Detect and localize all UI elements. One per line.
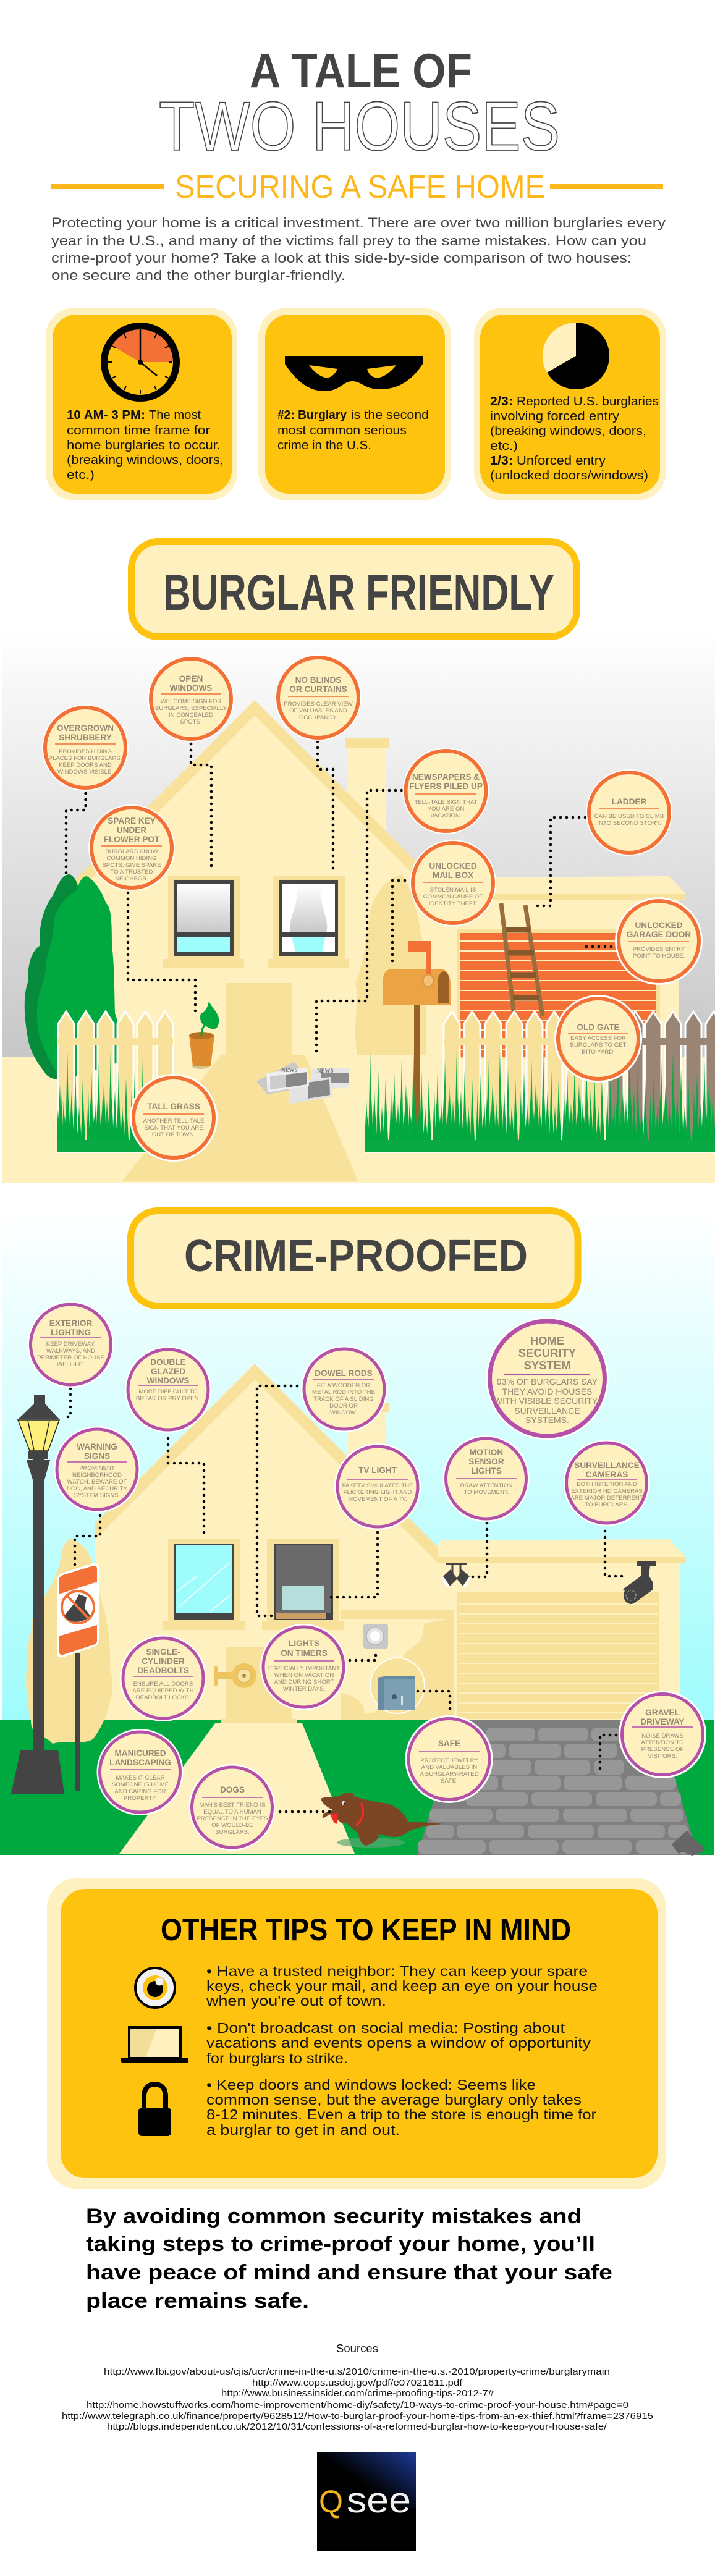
sources: http://www.businessinsider.com/crime-proofing-tips-2012-7#: [221, 2388, 494, 2399]
newspapers: [256, 1062, 349, 1104]
callout: manicured landscaping: PROPERTY.: [124, 1795, 157, 1802]
tips heading: OTHER TIPS TO KEEP IN MIND: [161, 1912, 571, 1947]
callout: single-cylinder deadbolts: ENSURE ALL DOORS: [133, 1681, 193, 1687]
callout: open windows: BURGLARS, ESPECIALLY: [155, 705, 227, 712]
callout: home security system: HOME: [530, 1334, 564, 1347]
callout: TV light: FAKETV SIMULATES THE: [342, 1482, 413, 1489]
callout: manicured landscaping: MANICURED: [114, 1749, 166, 1758]
callout: newspapers and flyers piled up: VACATION.: [430, 813, 462, 819]
callout: unlocked mail box: IDENTITY THEFT.: [429, 900, 477, 907]
callout: TV light: [334, 1443, 421, 1530]
callout: manicured landscaping: [96, 1729, 183, 1815]
callout: dogs: OF WOULD-BE: [211, 1822, 253, 1829]
callout: single-cylinder deadbolts: CYLINDER: [142, 1657, 185, 1666]
callout: motion sensor lights: [442, 1435, 529, 1522]
panel: forced entry stat card: 2/3:: [490, 395, 513, 408]
heading: burglar friendly: BURGLAR FRIENDLY: [163, 565, 554, 621]
callout: lights on timers: [260, 1624, 347, 1710]
callout: unlocked mail box: COMMON CAUSE OF: [423, 893, 483, 900]
double glazed window: [163, 1539, 245, 1630]
deadbolt: [214, 1663, 256, 1688]
sources: http://www.telegraph.co.uk/finance/property/9628512/How-to-burglar-proof-your-home-tips-from-an-ex-thief.html?frame=2376915: [62, 2411, 653, 2422]
panel: time frame stat card: (breaking windows, doors,: [67, 454, 224, 467]
callout: home security system: WITH VISIBLE SECURITY/: [494, 1396, 600, 1406]
closing statement: By avoiding common security mistakes and: [86, 2205, 582, 2228]
callout: lights on timers: ON TIMERS: [281, 1649, 328, 1658]
tip: social media: for burglars to strike.: [206, 2050, 348, 2066]
callout: lights on timers: WHEN ON VACATION: [274, 1672, 334, 1679]
callout: exterior lighting: KEEP DRIVEWAY,: [46, 1341, 95, 1348]
callout: exterior lighting: [27, 1301, 114, 1388]
open window: [163, 876, 244, 968]
ladder: [501, 903, 543, 1016]
mailbox: [383, 941, 451, 1132]
right fence and old gate: [444, 1011, 715, 1151]
intro paragraph: crime-proof your home? Take a look at this side-by-side comparison of two houses:: [51, 250, 632, 266]
callout: exterior lighting: WELL-LIT.: [57, 1361, 85, 1368]
callout: spare key under flower pot: SPOTS. GIVE SPARE: [102, 862, 161, 869]
tip: trusted neighbor: keys, check your mail, and keep an eye on your house: [206, 1978, 598, 1994]
callout: ladder: LADDER: [612, 797, 647, 806]
callout: exterior lighting: WALKWAYS, AND: [46, 1348, 95, 1354]
title: Two Houses outlined: TWO HOUSES: [159, 88, 560, 165]
callout: TV light: TV LIGHT: [358, 1466, 397, 1475]
icon: light timer: [363, 1624, 388, 1649]
callout: dowel rods: DOOR OR: [329, 1403, 358, 1409]
callout: manicured landscaping: MAKES IT CLEAR: [116, 1775, 165, 1781]
panel: burglary rank stat card: #2: Burglary: [277, 408, 347, 422]
callout: newspapers and flyers piled up: YOU ARE ON: [428, 806, 464, 813]
panel: forced entry stat card: Reported U.S. burglaries: [517, 395, 659, 408]
icon: clock: [104, 326, 177, 398]
panel: burglary rank stat card: [258, 308, 451, 500]
callout: surveillance cameras: TO BURGLARS.: [585, 1501, 629, 1508]
callout: unlocked garage door: POINT TO HOUSE.: [633, 953, 685, 960]
callout: tall grass: [130, 1074, 218, 1162]
closing statement: taking steps to crime-proof your home, you’ll: [86, 2232, 595, 2256]
front door: [221, 1647, 297, 1724]
callout: surveillance cameras: [564, 1440, 650, 1526]
sources: http://blogs.independent.co.uk/2012/10/31/confessions-of-a-reformed-burglar-how-to-keep-your-house-safe/: [107, 2422, 607, 2432]
callout: open windows: IN CONCEALED: [169, 712, 213, 719]
callout: dogs: EQUAL TO A HUMAN: [203, 1809, 261, 1815]
panel: burglary rank stat card: is the second: [351, 408, 429, 422]
title: A Tale Of: A TALE OF: [250, 43, 472, 98]
callout: exterior lighting: LIGHTING: [51, 1328, 91, 1337]
callout: home security system: [486, 1317, 608, 1440]
callout: unlocked garage door: PROVIDES ENTRY: [633, 946, 685, 953]
callout: double glazed windows: WINDOWS: [147, 1376, 189, 1385]
flower pot: [189, 1001, 219, 1069]
callout: overgrown shrubbery: OVERGROWN: [57, 724, 114, 733]
callout: gravel driveway: ATTENTION TO: [641, 1739, 684, 1746]
gravel driveway: [417, 1720, 704, 1856]
callout: old gate: EASY ACCESS FOR: [570, 1035, 626, 1042]
callout: old gate: INTO YARD.: [582, 1049, 615, 1055]
callout: lights on timers: LIGHTS: [289, 1639, 319, 1648]
tip: trusted neighbor: [206, 1963, 598, 2009]
icon: safe: [370, 1658, 425, 1713]
callout: spare key under flower pot: BURGLARS KNOW: [105, 848, 159, 855]
callout: gravel driveway: GRAVEL: [645, 1708, 680, 1717]
tip: locked doors: a burglar to get in and out.: [206, 2122, 400, 2138]
icon: motion sensor lights: [442, 1563, 470, 1587]
callout: motion sensor lights: LIGHTS: [471, 1466, 502, 1476]
callout: old gate: OLD GATE: [577, 1023, 620, 1032]
tip: social media: • Don't broadcast on social media: Posting about: [206, 2020, 565, 2036]
tip: social media: [206, 2020, 591, 2066]
callout: tall grass: TALL GRASS: [147, 1102, 200, 1111]
callout: surveillance cameras: CAMERAS: [586, 1470, 628, 1479]
callout: safe: AND VALUABLES IN: [421, 1764, 477, 1771]
callout: overgrown shrubbery: PROVIDES HIDING: [59, 748, 112, 755]
callout: TV light: FLICKERING LIGHT AND: [344, 1489, 412, 1496]
subtitle: Securing a safe home with rules: [51, 169, 663, 205]
sources: http://home.howstuffworks.com/home-improvement/home-diy/safety/10-ways-to-crime-proof-your-house.htm#page=0: [87, 2400, 628, 2410]
callout: home security system: THEY AVOID HOUSES: [502, 1387, 592, 1396]
callout: newspapers and flyers piled up: FLYERS PILED UP: [409, 782, 483, 791]
callout: dowel rods: METAL ROD INTO THE: [312, 1389, 375, 1396]
callout: old gate: [554, 995, 642, 1083]
callout: surveillance cameras: ARE MAJOR DETERRENT: [570, 1495, 643, 1501]
callout: dogs: MAN'S BEST FRIEND IS: [199, 1802, 266, 1809]
heading: burglar friendly: [131, 541, 577, 636]
callout: warning signs: NEIGHBORHOOD: [72, 1472, 122, 1479]
sources: http://www.fbi.gov/about-us/cjis/ucr/crime-in-the-u.s/2010/crime-in-the-u.s.-2010/property-crime/burglarymain: [104, 2367, 610, 2377]
dotted leader lines: [66, 741, 611, 1052]
panel: forced entry stat card: [474, 308, 666, 500]
logo: Q-See: [317, 2452, 416, 2551]
chimney: [345, 738, 389, 868]
callout: dowel rods: TRACK OF A SLIDING: [313, 1396, 374, 1403]
callout: spare key under flower pot: FLOWER POT: [104, 835, 160, 844]
callout: motion sensor lights: DRAW ATTENTION: [460, 1482, 512, 1489]
house body and roof: [95, 1364, 438, 1720]
callout: no blinds or curtains: OCCUPANCY.: [299, 714, 337, 721]
callout: safe: PROTECT JEWELRY: [420, 1757, 478, 1764]
callout: no blinds or curtains: OF VALUABLES AND: [289, 707, 347, 714]
callout: dogs: [189, 1764, 276, 1851]
callout: no blinds or curtains: NO BLINDS: [295, 675, 341, 685]
garage: [433, 876, 686, 1059]
callout: manicured landscaping: SOMEONE IS HOME: [112, 1781, 169, 1788]
panel: forced entry stat card: (unlocked doors/windows): [490, 469, 648, 483]
panel: forced entry stat card: Unforced entry: [517, 454, 606, 468]
subtitle: Securing a safe home with rules: SECURING A SAFE HOME: [175, 169, 545, 205]
warning sign: [57, 1563, 99, 1791]
door and walkway: [122, 983, 358, 1181]
panel: time frame stat card: home burglaries to occur.: [67, 439, 221, 452]
callout: surveillance cameras: SURVEILLANCE: [574, 1461, 640, 1470]
callout: exterior lighting: PERIMETER OF HOUSE: [37, 1354, 104, 1361]
callout: warning signs: SIGNS: [84, 1451, 110, 1461]
callout: lights on timers: WINTER DAYS.: [283, 1686, 325, 1692]
closing statement: place remains safe.: [86, 2289, 309, 2313]
callout: ladder: INTO SECOND STORY.: [597, 820, 661, 827]
callout: open windows: OPEN: [179, 674, 203, 683]
tall grass: [57, 1049, 715, 1152]
callout: unlocked garage door: GARAGE DOOR: [627, 930, 691, 939]
callout: no blinds or curtains: [275, 654, 362, 741]
callout: dowel rods: [301, 1346, 387, 1432]
callout: overgrown shrubbery: SHRUBBERY: [59, 733, 112, 742]
icon: padlock: [138, 2084, 171, 2136]
icon: laptop: [121, 2027, 188, 2063]
callout: manicured landscaping: AND CARING FOR: [114, 1788, 166, 1795]
callout: no blinds or curtains: OR CURTAINS: [289, 685, 347, 694]
callout: gravel driveway: NOISE DRAWS: [641, 1733, 683, 1739]
tip: trusted neighbor: when you're out of town.: [206, 1993, 386, 2009]
callout: unlocked mail box: UNLOCKED: [429, 861, 477, 871]
sources: Sources: [336, 2342, 378, 2355]
callout: home security system: SYSTEMS.: [525, 1415, 569, 1425]
intro paragraph: one secure and the other burglar-friendly.: [51, 268, 345, 283]
callout: single-cylinder deadbolts: [120, 1635, 206, 1721]
garage: [433, 1539, 686, 1720]
panel: time frame stat card: [46, 308, 237, 500]
callout: newspapers and flyers piled up: [403, 748, 489, 834]
closing statement: have peace of mind and ensure that your safe: [86, 2261, 612, 2284]
intro paragraph: year in the U.S., and many of the victims fall prey to the same mistakes. How can you: [51, 233, 646, 248]
window with TV light: [262, 1539, 344, 1630]
recessed porch with safe niche: [341, 1610, 454, 1720]
panel: forced entry stat card: (breaking windows, doors,: [490, 424, 646, 438]
callout: overgrown shrubbery: KEEP DOORS AND: [59, 762, 112, 769]
callout: manicured landscaping: LANDSCAPING: [109, 1758, 171, 1767]
overgrown shrubbery: [25, 874, 118, 1081]
newspapers: NEWS: [317, 1068, 334, 1074]
callout: warning signs: WARNING: [77, 1442, 117, 1451]
callout: open windows: WELCOME SIGN FOR: [161, 698, 221, 705]
callout: dowel rods: FIT A WOODEN OR: [317, 1382, 370, 1389]
callout: lights on timers: AND DURING SHORT: [274, 1679, 334, 1686]
scene: burglar friendly house: [2, 630, 715, 1183]
callout: no blinds or curtains: PROVIDES CLEAR VIEW: [284, 701, 353, 707]
window without blinds: [268, 876, 349, 968]
callout: gravel driveway: [619, 1691, 706, 1778]
callout: home security system: SYSTEM: [523, 1359, 571, 1372]
walkway: [119, 1723, 355, 1854]
callout: single-cylinder deadbolts: DEADBOLT LOCKS.: [136, 1694, 190, 1701]
callout: ladder: [586, 769, 672, 856]
callout: double glazed windows: GLAZED: [151, 1367, 185, 1376]
callout: unlocked mail box: [410, 840, 496, 926]
callout: open windows: [148, 656, 234, 742]
tip: trusted neighbor: • Have a trusted neighbor: They can keep your spare: [206, 1963, 588, 1979]
logo: Q-See: see: [347, 2480, 411, 2520]
callout: home security system: 93% OF BURGLARS SAY: [497, 1377, 598, 1387]
callout: motion sensor lights: MOTION: [470, 1448, 503, 1457]
tip: locked doors: common sense, but the average burglary only takes: [206, 2092, 582, 2108]
callout: double glazed windows: BREAK OR PRY OPEN.: [136, 1395, 200, 1402]
newspapers: NEWS: [281, 1067, 298, 1073]
panel: forced entry stat card: etc.): [490, 439, 518, 453]
callout: dowel rods: DOWEL RODS: [315, 1369, 373, 1378]
panel: other tips to keep in mind: [47, 1878, 666, 2189]
callout: tall grass: ANOTHER TELL-TALE: [143, 1118, 204, 1125]
callout: warning signs: DOG, AND SECURITY: [67, 1485, 128, 1492]
callout: double glazed windows: DOUBLE: [150, 1358, 186, 1367]
callout: spare key under flower pot: [88, 804, 175, 891]
callout: gravel driveway: DRIVEWAY: [640, 1717, 685, 1726]
intro paragraph: Protecting your home is a critical investment. There are over two million burglaries every: [51, 215, 666, 230]
callout: home security system: SECURITY: [518, 1346, 577, 1359]
panel: time frame stat card: common time frame for: [67, 424, 210, 437]
scene: crime-proofed house: [0, 1211, 714, 1856]
callout: overgrown shrubbery: WINDOWS VISIBLE.: [57, 769, 113, 775]
callout: double glazed windows: [125, 1346, 211, 1433]
callout: spare key under flower pot: SPARE KEY: [108, 816, 156, 826]
callout: safe: A BURGLARY-RATED: [420, 1771, 479, 1778]
callout: spare key under flower pot: UNDER: [117, 826, 146, 835]
callout: newspapers and flyers piled up: TELL-TALE SIGN THAT: [414, 799, 478, 806]
callout: warning signs: [54, 1426, 140, 1513]
chimney: [345, 1403, 389, 1535]
callout: tall grass: SIGN THAT YOU ARE: [144, 1125, 203, 1131]
tip: social media: vacations and events opens a window of opportunity: [206, 2035, 591, 2051]
icon: one third pie chart: [543, 323, 609, 389]
callout: home security system: SURVEILLANCE: [514, 1406, 580, 1416]
callout: tall grass: OUT OF TOWN.: [152, 1131, 195, 1138]
callout: safe: [405, 1715, 493, 1803]
callout: unlocked garage door: UNLOCKED: [635, 921, 683, 930]
callout: dowel rods: WINDOW.: [330, 1409, 357, 1416]
callout: spare key under flower pot: COMMON HIDING: [106, 855, 157, 862]
panel: forced entry stat card: 1/3:: [490, 454, 513, 468]
panel: time frame stat card: 10 AM- 3 PM:: [67, 408, 145, 422]
callout: warning signs: PROMINENT: [79, 1465, 115, 1472]
dotted leader lines: [62, 1386, 628, 1812]
manicured shrub behind sign: [26, 1539, 112, 1744]
callout: safe: SAFE.: [441, 1778, 458, 1784]
callout: open windows: SPOTS.: [180, 719, 202, 725]
callout: gravel driveway: PRESENCE OF: [641, 1746, 684, 1753]
callout: warning signs: SYSTEM SIGNS.: [74, 1492, 120, 1499]
callout: single-cylinder deadbolts: DEADBOLTS: [137, 1666, 189, 1675]
tip: locked doors: • Keep doors and windows locked: Seems like: [206, 2077, 536, 2093]
panel: time frame stat card: etc.): [67, 468, 95, 482]
callout: open windows: WINDOWS: [170, 683, 212, 693]
gravel rocks: [672, 1831, 704, 1856]
heading: crime-proofed: [131, 1211, 578, 1306]
icon: guard dog: [321, 1793, 442, 1848]
callout: unlocked mail box: MAIL BOX: [433, 871, 473, 880]
callout: surveillance cameras: BOTH INTERIOR AND: [577, 1481, 637, 1488]
panel: time frame stat card: The most: [149, 408, 201, 422]
sources: [62, 2342, 653, 2432]
callout: unlocked mail box: STOLEN MAIL IS: [430, 887, 476, 893]
intro paragraph: [51, 215, 666, 283]
callout: newspapers and flyers piled up: NEWSPAPERS &: [412, 772, 480, 782]
callout: TV light: MOVEMENT OF A TV.: [348, 1496, 407, 1503]
panel: burglary rank stat card: most common serious: [277, 424, 407, 437]
icon: surveillance camera: [623, 1561, 656, 1604]
tip: locked doors: [206, 2077, 596, 2138]
callout: dogs: BURGLARS.: [215, 1829, 250, 1836]
sources: http://www.cops.usdoj.gov/pdf/e07021611.pdf: [252, 2378, 463, 2388]
callout: single-cylinder deadbolts: SINGLE-: [146, 1647, 180, 1657]
closing statement: [86, 2205, 612, 2313]
panel: burglary rank stat card: crime in the U.S.: [277, 439, 371, 452]
icon: burglar mask: [285, 356, 423, 391]
callout: gravel driveway: VISITORS.: [648, 1753, 677, 1760]
bush behind mailbox: [355, 874, 426, 1055]
house body and roof: [65, 700, 448, 1057]
panel: forced entry stat card: involving forced entry: [490, 410, 619, 423]
callout: motion sensor lights: TO MOVEMENT.: [464, 1489, 509, 1496]
callout: overgrown shrubbery: PLACES FOR BURGLARS.: [49, 755, 122, 762]
tip: locked doors: 8-12 minutes. Even a trip to the store is enough time for: [206, 2106, 596, 2122]
callout: ladder: CAN BE USED TO CLIMB: [594, 813, 664, 820]
callout: single-cylinder deadbolts: ARE EQUIPPED WITH: [132, 1687, 194, 1694]
callout: dogs: DOGS: [220, 1785, 245, 1794]
callout: dogs: PRESENCE IN THE EYES: [197, 1815, 268, 1822]
left fence: [58, 1011, 173, 1151]
heading: crime-proofed: CRIME-PROOFED: [184, 1231, 528, 1281]
callout: overgrown shrubbery: [42, 704, 129, 791]
icon: eye: [135, 1968, 175, 2008]
logo: Q-See: Q: [319, 2484, 343, 2519]
callout: warning signs: WATCH, BEWARE OF: [67, 1479, 127, 1485]
callout: double glazed windows: MORE DIFFICULT TO: [138, 1388, 198, 1395]
callout: spare key under flower pot: NEIGHBOR.: [115, 876, 148, 882]
callout: old gate: BURGLARS TO GET: [570, 1042, 627, 1049]
callout: safe: SAFE: [438, 1739, 460, 1748]
callout: lights on timers: ESPECIALLY IMPORTANT: [268, 1665, 340, 1672]
callout: unlocked garage door: [615, 897, 703, 985]
callout: surveillance cameras: EXTERIOR HD CAMERAS: [571, 1488, 643, 1495]
callout: motion sensor lights: SENSOR: [468, 1457, 504, 1466]
street lamp: [11, 1395, 64, 1794]
callout: exterior lighting: EXTERIOR: [49, 1319, 92, 1328]
callout: spare key under flower pot: TO A TRUSTED: [111, 869, 153, 876]
